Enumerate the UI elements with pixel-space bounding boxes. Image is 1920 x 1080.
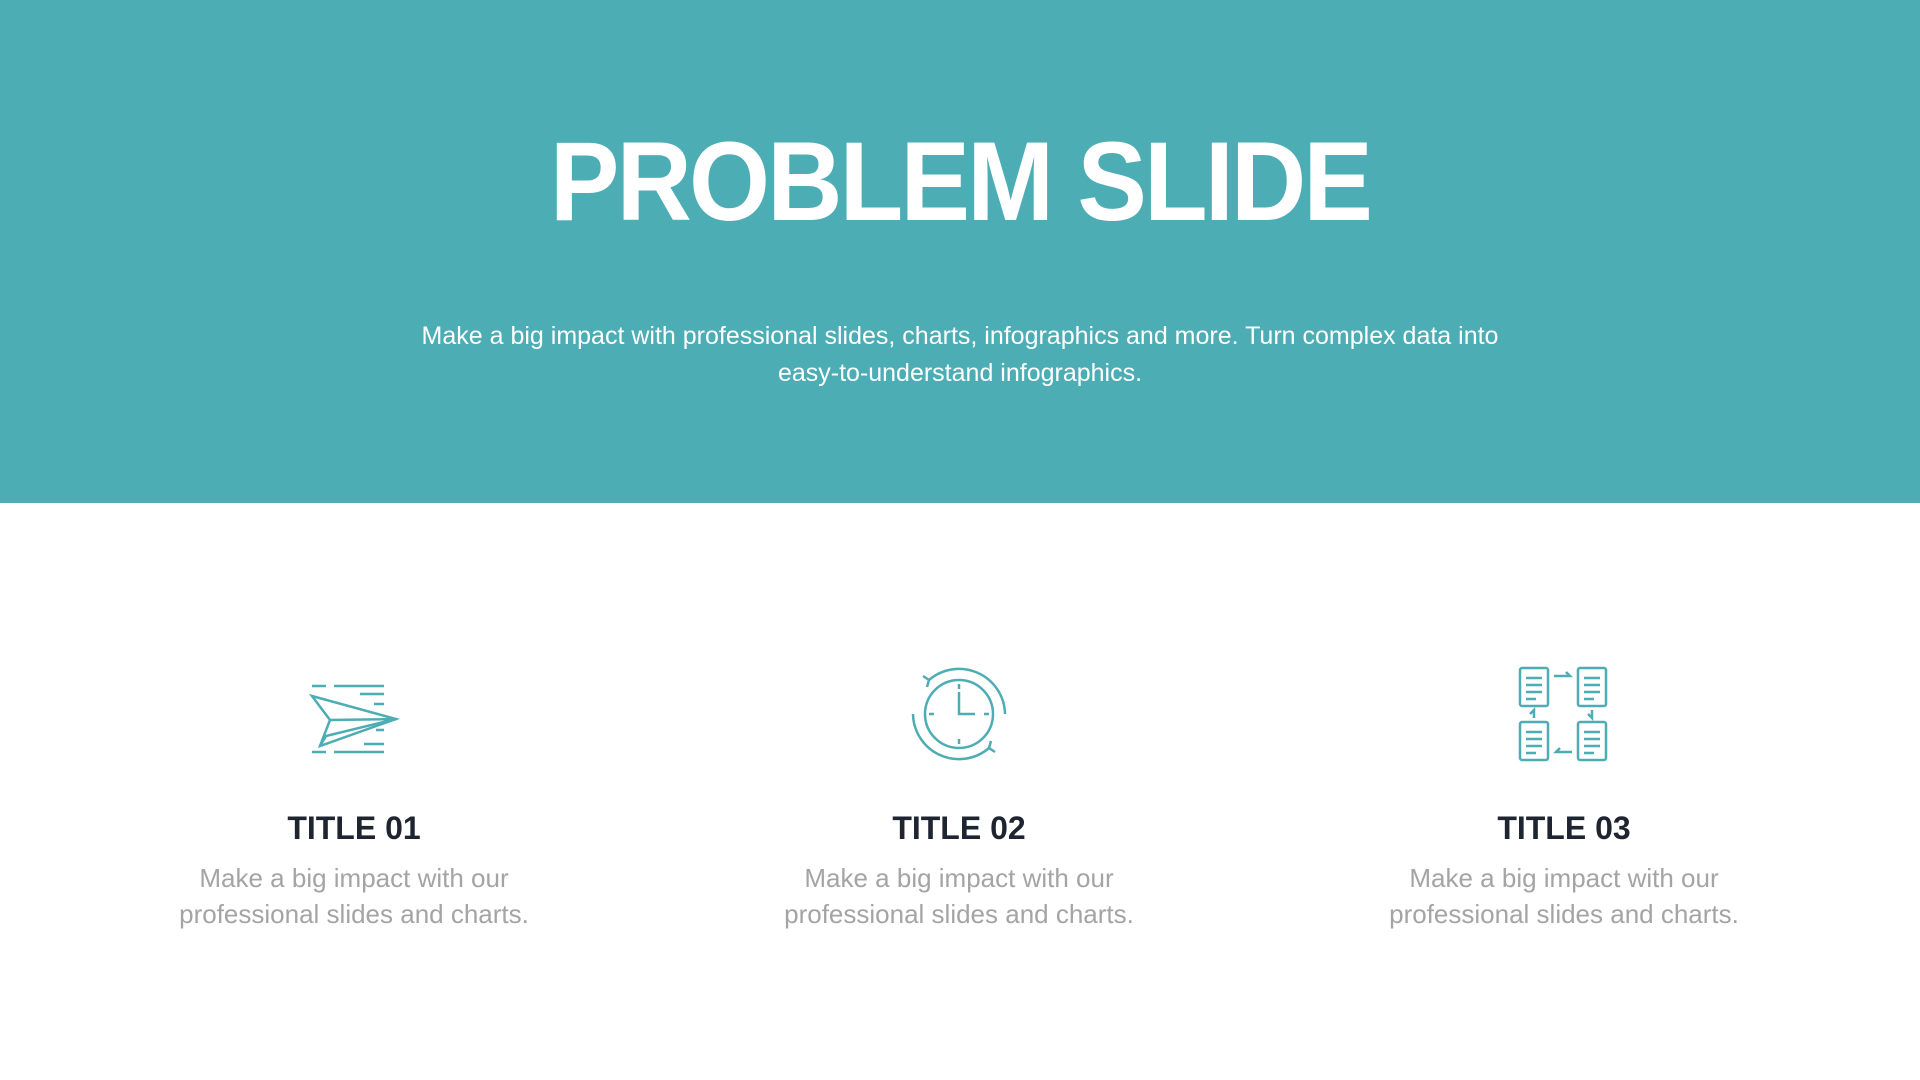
panel: column 3 <box>1389 666 1739 929</box>
text: Make a big impact with our <box>1409 863 1719 893</box>
text <box>1389 863 1739 929</box>
subtitle: Make a big impact with professional slides, charts, infographics and more. Turn complex data into easy-to-understand infographics. <box>422 322 1498 387</box>
text <box>179 863 529 929</box>
heading: TITLE 03 <box>1497 810 1631 846</box>
heading: TITLE 02 <box>892 810 1026 846</box>
text <box>784 863 1134 929</box>
text: professional slides and charts. <box>179 899 529 929</box>
panel: column 1 <box>179 684 529 929</box>
text: professional slides and charts. <box>1389 899 1739 929</box>
title: PROBLEM SLIDE <box>550 119 1370 244</box>
text: Make a big impact with our <box>804 863 1114 893</box>
panel: column 2 <box>784 668 1134 929</box>
heading: TITLE 01 <box>287 810 421 846</box>
icon: clock <box>912 668 1006 760</box>
icon: paper plane <box>308 684 400 754</box>
icon: documents cycle <box>1518 666 1608 762</box>
header band <box>0 0 1920 503</box>
text: Make a big impact with our <box>199 863 509 893</box>
text: professional slides and charts. <box>784 899 1134 929</box>
